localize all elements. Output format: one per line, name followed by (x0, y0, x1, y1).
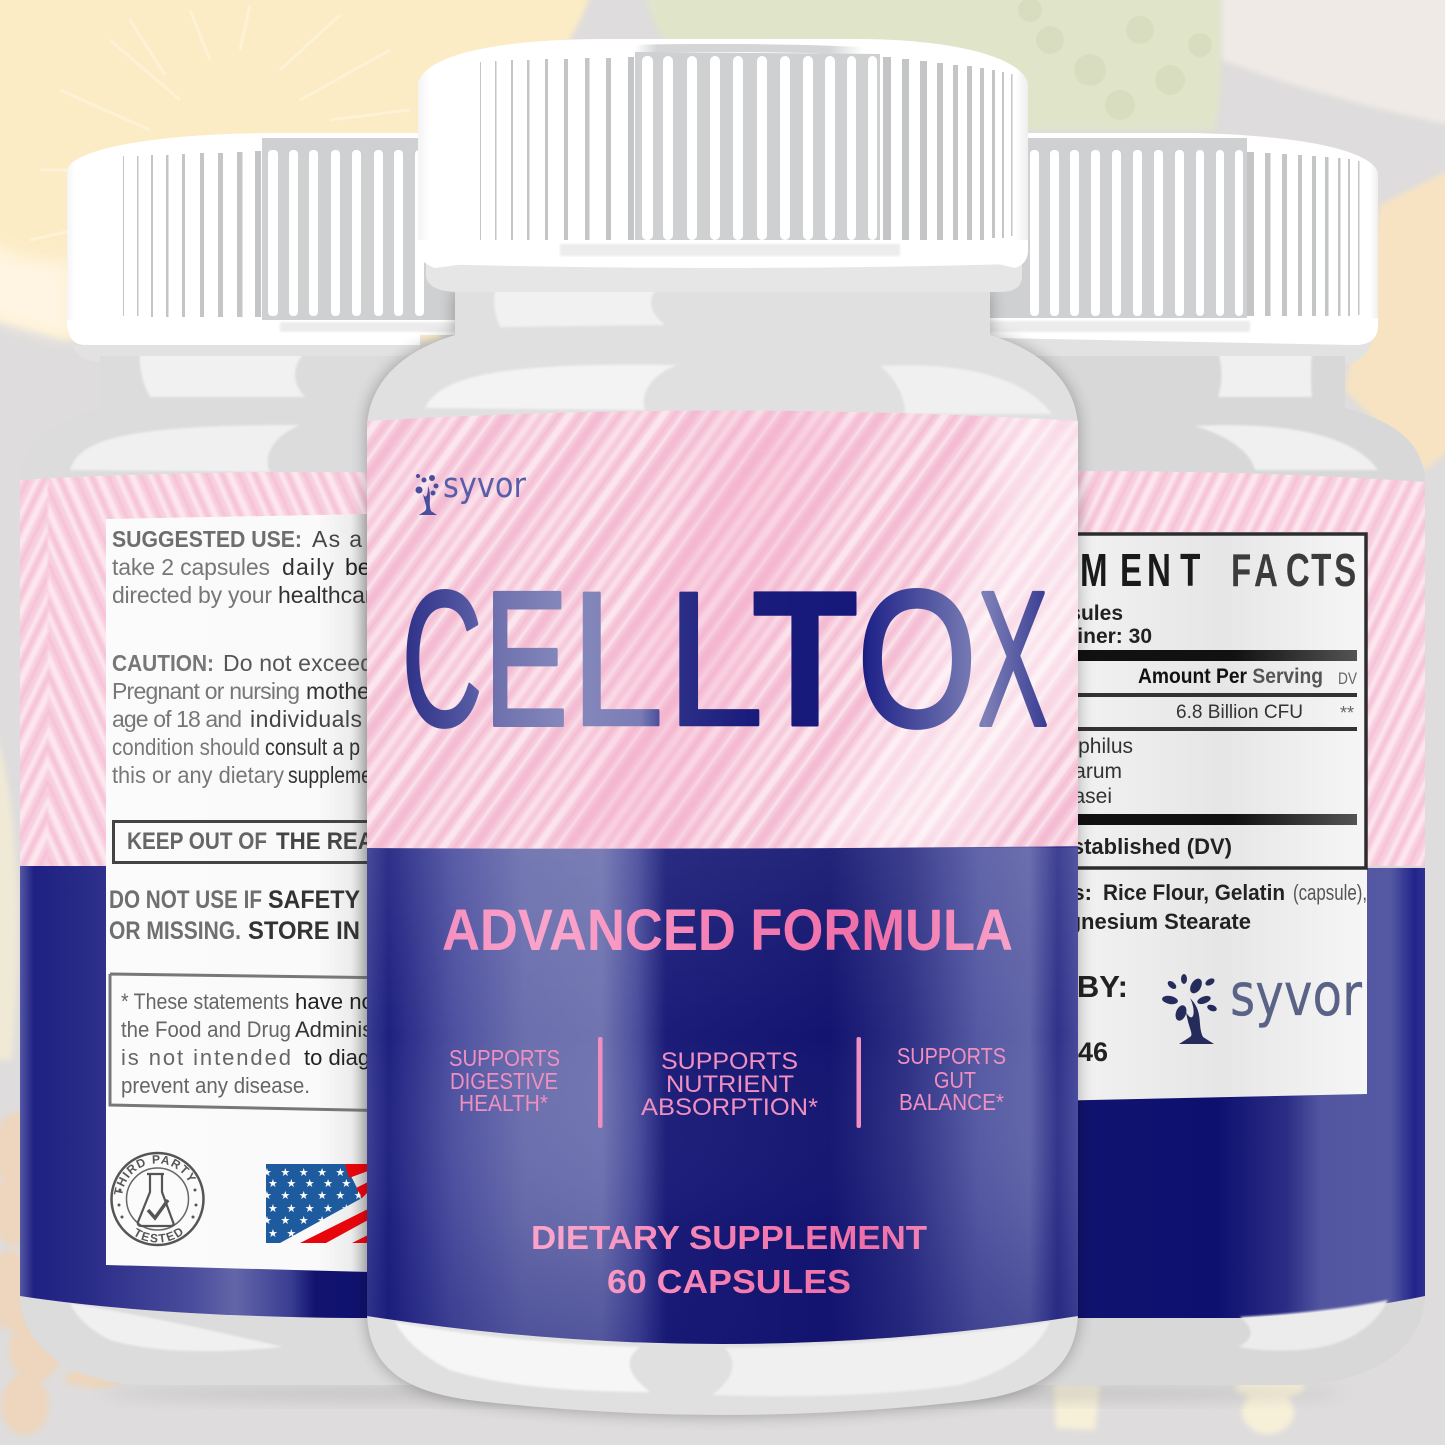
left bottle: third party tested seal (110, 1152, 205, 1246)
right bottle: rule (1000, 727, 1357, 731)
right bottle: strains list: Casei (1058, 785, 1112, 808)
center bottle: neck ring (426, 262, 1022, 292)
right bottle: other ingredients: (capsule), (1293, 880, 1367, 905)
right bottle: serving info (978, 602, 1152, 648)
benefit: nutrient absorption (641, 1048, 818, 1121)
background: shadow below bottles (103, 1383, 1343, 1403)
right bottle: strains list: Acidophilus (1026, 735, 1133, 758)
left bottle: suggested use text: directed by your (112, 582, 272, 608)
left bottle: cap lip (67, 320, 460, 345)
left bottle: safety seal warning (109, 886, 360, 945)
left bottle: american flag (266, 1164, 367, 1243)
left bottle: shoulder highlight (70, 425, 300, 472)
background: broccoli (645, 0, 1225, 130)
benefit: nutrient absorption: NUTRIENT (666, 1071, 794, 1098)
left bottle: safety seal warning: OR MISSING. (109, 917, 241, 945)
right bottle: amount row: Amount Per Serving (1138, 664, 1323, 688)
left bottle: keep out of reach box: KEEP OUT OF (127, 828, 267, 855)
right bottle: neck highlight (1218, 352, 1312, 397)
right bottle: cap (980, 133, 1378, 345)
left bottle: neck highlight (140, 352, 305, 397)
left bottle: body (20, 345, 460, 1385)
right bottle: billion cfu row: 6.8 Billion CFU (1176, 701, 1303, 723)
left bottle: caution text: consult a p (265, 734, 360, 760)
left bottle: american flag: ★ ★ ★ ★ ★ ★ ★ (268, 1177, 391, 1190)
left bottle: disclaimer box: have not (295, 989, 380, 1014)
benefit: digestive health: DIGESTIVE (450, 1068, 558, 1094)
left bottle: suggested use text: take 2 capsules (112, 554, 270, 580)
center bottle: base highlight right (712, 1322, 1050, 1396)
product title: CELLTOX: L (666, 551, 764, 766)
center bottle: cap thin ribs (480, 57, 1012, 240)
left bottle: disclaimer box: * These statements (121, 989, 289, 1014)
left bottle: disclaimer box: is not intended (121, 1045, 291, 1070)
left bottle: suggested use text: healthcare (278, 582, 385, 608)
left bottle: navy band (20, 866, 460, 1318)
left bottle: base highlight (70, 1303, 283, 1351)
left bottle: cap grey backdrop (262, 138, 460, 322)
left bottle: safety seal warning: SAFETY (268, 886, 360, 914)
center bottle: front label (355, 39, 1110, 1415)
left bottle: caution text (112, 650, 389, 788)
left bottle: keep out of reach box (114, 822, 406, 862)
left bottle: suggested use text: As a (312, 526, 362, 552)
right bottle: pink label (1078, 471, 1425, 866)
right bottle: billion cfu row: ** (1340, 703, 1354, 723)
left bottle: caution text: mothers (306, 678, 389, 704)
right bottle: amount row: DV (1338, 669, 1358, 688)
center bottle: cap white ribs (642, 56, 877, 240)
product title: CELLTOX: L (570, 551, 664, 766)
right bottle: other ingredients: Magnesium Stearate (1037, 909, 1251, 934)
right bottle: facts heading: SUPPLE (940, 546, 1072, 596)
brand logo: syvor small: syvor (443, 466, 527, 506)
right bottle: base highlight (1238, 1300, 1388, 1351)
left bottle: keep out of reach box: THE REACH (276, 828, 406, 855)
right bottle: thick rule bottom (1000, 814, 1357, 825)
background: pale bits lower right (1054, 1378, 1305, 1434)
left bottle: caution text: Pregnant or nursing (112, 678, 300, 704)
right bottle: strains list (1026, 735, 1133, 808)
product title: CELLTOX: X (978, 551, 1048, 766)
left bottle: american flag: ★ ★ ★ (268, 1227, 317, 1240)
left bottle: american flag: ★ ★ ★ ★ ★ ★ ★ (262, 1189, 385, 1202)
right bottle: navy band (985, 868, 1425, 1318)
left bottle: caution text: CAUTION: (112, 650, 214, 676)
left bottle: suggested use text: daily (282, 554, 334, 580)
benefit: nutrient absorption: ABSORPTION* (641, 1094, 818, 1121)
benefit: gut balance (897, 1043, 1006, 1115)
center bottle: cast shadow (367, 290, 1078, 1415)
benefit: digestive health: HEALTH* (459, 1090, 548, 1116)
footer: 60 capsules: 60 CAPSULES (607, 1263, 851, 1300)
center bottle: neck highlight (494, 285, 665, 327)
product title: CELLTOX: C (402, 551, 482, 766)
right bottle: facts heading: MENT (1080, 546, 1201, 596)
left bottle: white panel (106, 514, 370, 1272)
right bottle: cap white ribs (1030, 150, 1243, 316)
benefit: gut balance: GUT (934, 1067, 976, 1093)
right bottle: syvor logo (1161, 960, 1363, 1044)
product title: CELLTOX: O (858, 551, 976, 766)
left bottle: caution text: condition should (112, 734, 260, 760)
right bottle: shoulder highlight (1195, 425, 1378, 470)
product title: CELLTOX: T (753, 551, 857, 766)
right bottle: facts heading: FACTS (1231, 546, 1356, 596)
right bottle: cap lip (980, 318, 1378, 345)
left bottle: third party tested seal: THIRD PARTY (114, 1155, 196, 1194)
benefit: digestive health: SUPPORTS (449, 1045, 560, 1071)
background: pale food left edge (0, 720, 17, 1060)
right bottle: body (985, 345, 1425, 1385)
left bottle: cap white ribs (268, 150, 424, 316)
right bottle: strains list: Plantarum (1026, 760, 1122, 783)
right bottle: syvor logo: syvor (1230, 960, 1363, 1029)
left bottle: safety seal warning: STORE IN (248, 917, 360, 945)
center bottle: cap upper rim (440, 44, 1012, 74)
benefit: gut balance: SUPPORTS (897, 1043, 1006, 1069)
left bottle: american flag: ★ ★ ★ ★ ★ ★ (268, 1202, 372, 1215)
left bottle: cap thin ribs (123, 151, 261, 317)
left bottle: american flag: ★ ★ ★ ★ ★ ★ ★ (262, 1166, 385, 1179)
center bottle: cap (418, 39, 1028, 268)
background: plate top right (1222, 0, 1445, 125)
left bottle: cap (67, 133, 460, 345)
left bottle: american flag: ★ ★ ★ ★ (262, 1214, 329, 1227)
right bottle: distributed by: BY: (1077, 969, 1128, 1004)
background: orange slice (0, 0, 595, 340)
right bottle: supplement facts box (940, 534, 1366, 868)
right bottle: thick rule top (1000, 650, 1357, 661)
left bottle: caution text: individuals (250, 706, 362, 732)
product title: CELLTOX: E (484, 551, 568, 766)
left bottle: caution text: age of 18 and (112, 706, 242, 732)
benefit: nutrient absorption: SUPPORTS (661, 1048, 798, 1075)
right bottle: white panel (1000, 532, 1367, 1102)
center bottle: navy band (367, 846, 1078, 1344)
left bottle: third party tested seal: TESTED (135, 1228, 182, 1242)
right bottle: cap grey backdrop (980, 138, 1247, 320)
left bottle: disclaimer box (110, 974, 434, 1111)
divider right (856, 1037, 861, 1128)
right bottle: supplement facts (940, 133, 1430, 1385)
right bottle: rule (1000, 693, 1357, 697)
left bottle: back label (20, 133, 455, 1385)
right bottle: serving info: 2 Capsules (1012, 602, 1123, 625)
left bottle: disclaimer box: prevent any disease. (121, 1073, 310, 1098)
headline: advanced formula: ADVANCED FORMULA (442, 898, 1013, 963)
left bottle: suggested use text: before (345, 554, 410, 580)
right bottle: neck ring (990, 336, 1372, 364)
center bottle: pink label (367, 410, 1078, 1344)
left bottle: suggested use text: SUGGESTED USE: (112, 526, 302, 552)
center bottle: shoulder highlights (425, 365, 1052, 414)
right bottle: cap thin ribs (1247, 152, 1360, 316)
left bottle: suggested use text (112, 526, 410, 608)
benefit: digestive health (449, 1045, 560, 1116)
right bottle: daily value note: not established (DV) (1019, 834, 1232, 859)
left bottle: disclaimer box: the Food and Drug (121, 1017, 291, 1042)
left bottle: caution text: Do not exceed (223, 650, 373, 676)
left bottle: pink label (20, 472, 367, 866)
right bottle: zip digits: 46 (1078, 1037, 1108, 1067)
left bottle: neck ring (72, 345, 420, 362)
background: seeds lower left (0, 1112, 125, 1435)
left bottle: safety seal warning: DO NOT USE IF (109, 886, 262, 914)
brand logo: syvor small (416, 466, 527, 515)
right bottle: other ingredients (966, 880, 1367, 934)
background: orange wedge right (1345, 170, 1445, 470)
left bottle: caution text: this or any dietary (112, 762, 284, 788)
center bottle: body (367, 270, 1078, 1415)
center bottle: cap lip (418, 240, 1028, 268)
center bottle: base highlight (395, 1322, 650, 1392)
benefit: gut balance: BALANCE* (899, 1089, 1004, 1115)
center bottle: cap grey backdrop (635, 52, 880, 242)
right bottle: other ingredients: Ingredients: (966, 880, 1092, 905)
left bottle: caution text: supplement (288, 762, 389, 788)
right bottle: other ingredients: Rice Flour, Gelatin (1103, 880, 1285, 905)
left bottle: disclaimer box: to diagnose (304, 1045, 418, 1070)
left bottle: disclaimer box: Administration (295, 1017, 434, 1042)
right bottle: serving info: Per Container: 30 (978, 625, 1152, 648)
divider left (598, 1037, 602, 1128)
footer: dietary supplement: DIETARY SUPPLEMENT (531, 1219, 927, 1256)
